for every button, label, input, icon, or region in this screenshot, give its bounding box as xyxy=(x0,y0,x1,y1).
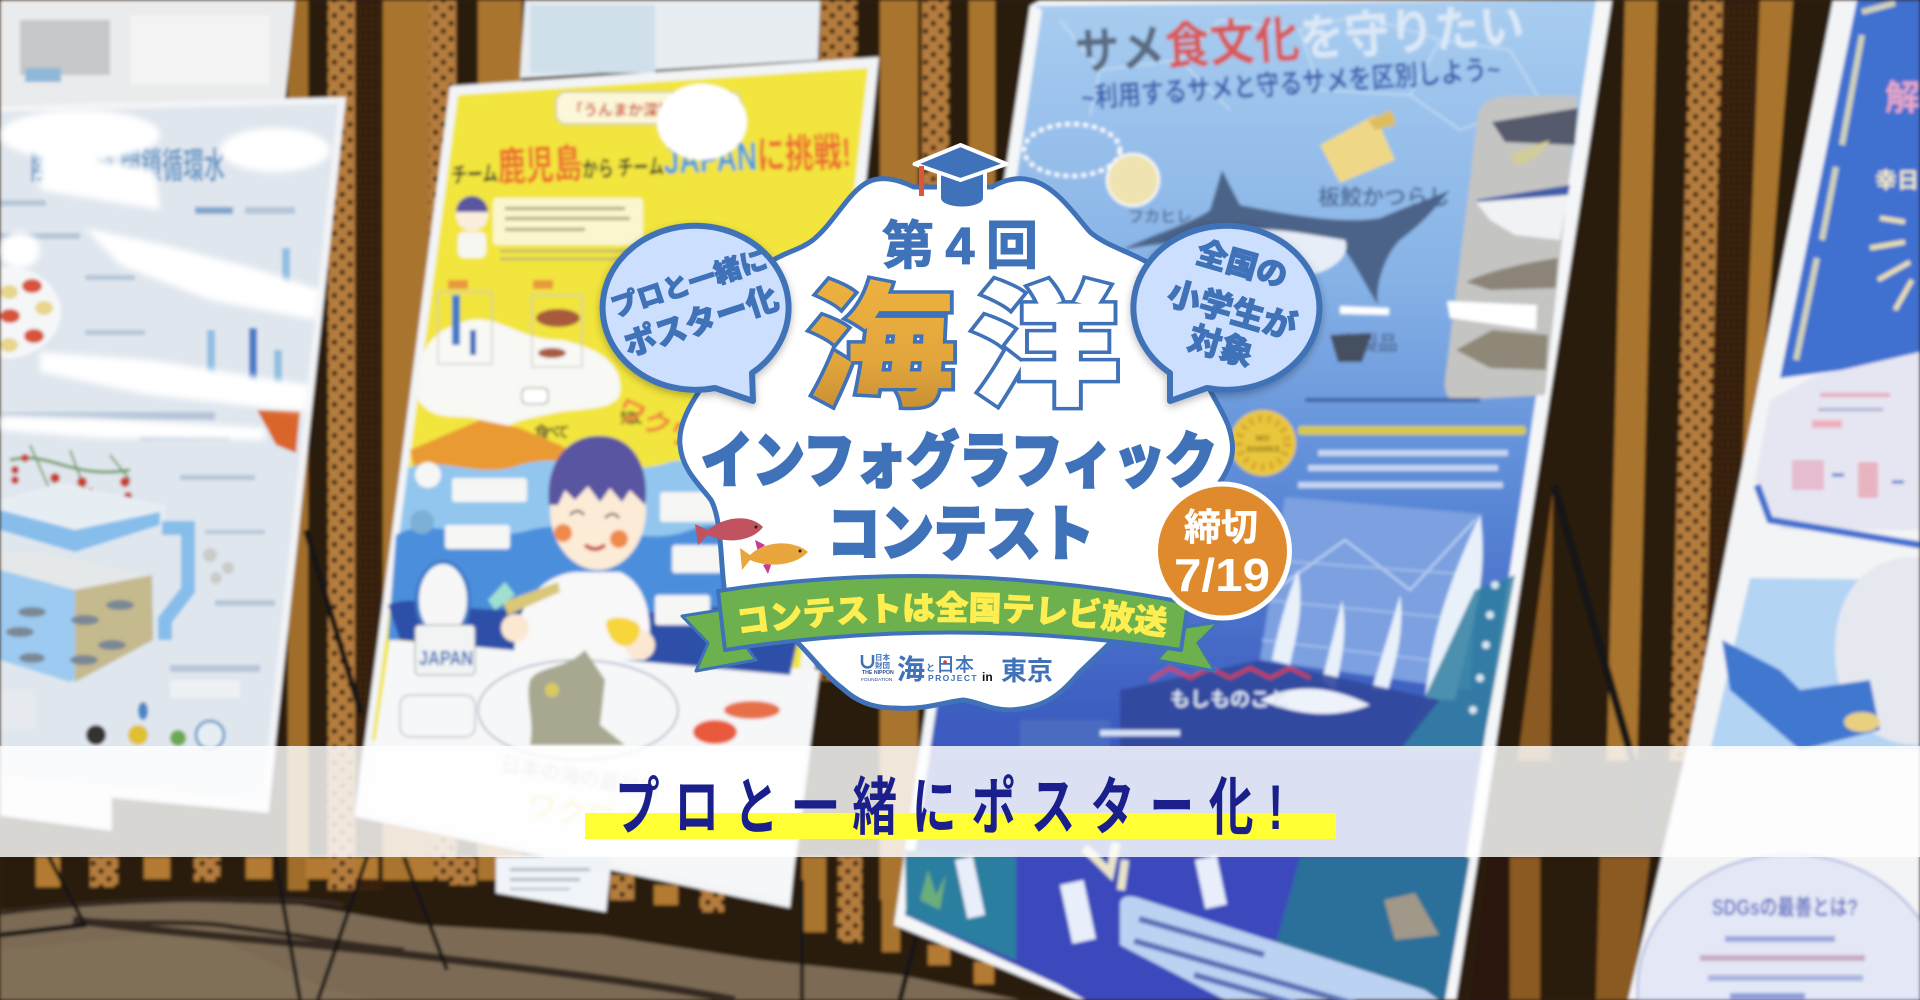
translucent white caption band xyxy=(0,746,1920,857)
plate and fish xyxy=(400,650,780,760)
logo row: The Nippon Foundation / 海と日本 PROJECT in 東京: FOUNDATION xyxy=(861,677,893,683)
orange wedge xyxy=(257,410,300,453)
cutting board xyxy=(1320,115,1395,183)
small sheet behind yellow poster xyxy=(520,0,820,78)
badge: deadline 7/19: 締切 xyxy=(1184,507,1258,548)
sparkle rays xyxy=(1870,218,1912,310)
NO SHARKS sun badge: SHARKS xyxy=(1246,445,1281,454)
bubble: プロと一緒にポスター化 xyxy=(603,226,789,401)
bubble: 全国の小学生が対象: 全国の xyxy=(1192,235,1291,294)
hydroponic top tank xyxy=(0,483,188,640)
ribbon path text: コンテストは全国テレビ放送 xyxy=(739,590,1167,638)
labels: 牛製品 xyxy=(1338,332,1398,355)
header label: 「うんまか深掘」 xyxy=(568,101,688,119)
teal paper scrap xyxy=(488,582,515,610)
circle with fish xyxy=(0,267,61,358)
bubble: 全国の小学生が対象: 小学生が xyxy=(1163,274,1300,346)
easel stand legs xyxy=(0,485,1660,1000)
JAPAN icon xyxy=(415,562,475,675)
bottom figures xyxy=(0,680,240,749)
kanji title fragments: 解 xyxy=(1885,79,1920,118)
panel content xyxy=(1792,393,1904,498)
water net pattern xyxy=(1060,15,1540,130)
poster: shark poster (centre right) xyxy=(894,0,1612,1000)
poster: aquaponics (left) xyxy=(0,97,346,830)
carpet floor xyxy=(0,900,1020,1000)
title: チーム鹿児島から チームJAPANに挑戦! xyxy=(450,131,852,192)
dark blue section xyxy=(1120,660,1440,750)
board handle xyxy=(1368,110,1396,130)
kanji title fragments: 幸日 xyxy=(1875,168,1919,193)
info boxes in waves xyxy=(410,462,722,625)
bubble: プロと一緒にポスター化: プロと一緒に xyxy=(608,244,771,323)
subtitle: ~利用するサメと守るサメを区別しよう~ xyxy=(1080,54,1501,114)
panel outline xyxy=(1757,485,1920,545)
lower panels below band xyxy=(905,843,1470,1000)
poster: yellow Kagoshima poster xyxy=(355,57,879,908)
logo row: The Nippon Foundation / 海と日本 PROJECT in 東京: THE NIPPON xyxy=(862,670,894,676)
orange mountain xyxy=(410,420,600,470)
tomato plants xyxy=(10,445,132,500)
small labels xyxy=(522,388,727,468)
speech box xyxy=(493,198,643,245)
logo row: The Nippon Foundation / 海と日本 PROJECT in 東京 xyxy=(861,652,1053,686)
boy character xyxy=(501,436,655,660)
fish tank xyxy=(0,548,234,682)
emblem: contest logo xyxy=(595,143,1326,712)
small labels: ワクワク xyxy=(612,392,727,468)
sign text xyxy=(510,868,590,890)
lower pale round panel: SDGsの最善とは? xyxy=(1712,895,1858,920)
icon: red fish xyxy=(695,518,763,545)
text lines xyxy=(1298,398,1526,488)
heading: コンテスト: コンテスト xyxy=(827,501,1094,568)
heading: インフォグラフィック: インフォグラフィック xyxy=(701,428,1217,495)
header pill xyxy=(556,92,741,124)
labels: 板鮫かつらし xyxy=(1318,185,1450,210)
ribbon right tail xyxy=(1157,622,1219,671)
left background sheet xyxy=(0,0,295,105)
jaw bubble xyxy=(1024,124,1120,176)
white circle xyxy=(1835,557,1920,745)
caption text: プロと一緒にポスター化! xyxy=(615,771,1298,843)
heading: 第4回: 第4回 xyxy=(882,218,1038,276)
bubble: 全国の小学生が対象 xyxy=(1133,226,1319,401)
bubble: プロと一緒にポスター化: ポスター化 xyxy=(620,280,783,363)
lower pale round panel xyxy=(1638,854,1920,1000)
section labels xyxy=(0,200,295,672)
small labels: 食べて xyxy=(534,423,570,441)
glare streak xyxy=(1340,301,1537,330)
glare blob xyxy=(657,84,747,160)
JAPAN icon: JAPAN xyxy=(419,648,473,670)
grey shark panel xyxy=(1445,96,1578,400)
wave: navy xyxy=(388,601,800,675)
slat ends below the band xyxy=(36,857,994,984)
NO SHARKS sun badge: NO! xyxy=(1256,434,1270,443)
orange tags xyxy=(448,280,553,289)
logo row: The Nippon Foundation / 海と日本 PROJECT in 東京: 海 xyxy=(897,654,925,685)
jellyfish net xyxy=(1330,333,1372,362)
glare streaks on left poster xyxy=(0,110,330,440)
poster: far right poster xyxy=(1628,0,1920,1000)
text lines xyxy=(500,207,660,260)
gold frame strokes xyxy=(1796,3,1895,360)
heading: 海: 海 xyxy=(807,274,956,423)
gold beak xyxy=(1844,712,1880,732)
figures in cloud xyxy=(438,292,582,367)
section details: もしものこと xyxy=(1170,689,1290,711)
labels xyxy=(1128,185,1450,355)
badge: deadline 7/19: 7/19 xyxy=(1174,549,1270,601)
grey hex info panel xyxy=(1755,352,1920,530)
ribbon banner xyxy=(718,576,1188,650)
labels: フカヒレ xyxy=(1128,208,1192,226)
badge: deadline 7/19 xyxy=(1156,484,1290,618)
kanji title fragments xyxy=(1875,79,1920,193)
bubble: 全国の小学生が対象: 対象 xyxy=(1184,319,1258,373)
shark illustration xyxy=(1122,170,1450,305)
NO SHARKS sun badge xyxy=(1230,410,1296,476)
section details xyxy=(1020,668,1370,750)
light blue lower xyxy=(1710,578,1920,750)
wave: light blue xyxy=(396,460,758,560)
logo row: The Nippon Foundation / 海と日本 PROJECT in 東京: 日本 xyxy=(936,654,974,676)
wave: mid blue xyxy=(388,526,750,640)
lower text faint: 日本の海の最前線 xyxy=(499,752,661,803)
logo row: The Nippon Foundation / 海と日本 PROJECT in 東京: と xyxy=(926,663,935,673)
whale tail xyxy=(1722,640,1880,750)
small sign under yellow poster xyxy=(496,855,612,912)
white badge blob xyxy=(680,179,1233,710)
white cloud xyxy=(418,319,620,430)
heading: 洋: 洋 xyxy=(970,274,1120,423)
character icon xyxy=(456,196,488,258)
sheet detail xyxy=(530,5,655,73)
logo row: The Nippon Foundation / 海と日本 PROJECT in 東京: 日本 xyxy=(875,652,890,662)
teal side band xyxy=(1400,575,1515,750)
logo row: The Nippon Foundation / 海と日本 PROJECT in 東京: 東京 xyxy=(1001,656,1053,686)
logo row: The Nippon Foundation / 海と日本 PROJECT in 東京: PROJECT xyxy=(928,673,978,683)
logo row: The Nippon Foundation / 海と日本 PROJECT in 東京: 財団 xyxy=(875,660,890,670)
fin soup xyxy=(1107,154,1159,206)
small labels: 知って xyxy=(620,409,645,427)
title text: 陸上養殖 閉鎖循環水 xyxy=(30,145,225,186)
scale dots xyxy=(1469,581,1499,714)
ribbon left tail xyxy=(682,610,756,671)
sheet scribbles xyxy=(20,15,270,85)
chart panel xyxy=(1260,497,1483,700)
bars xyxy=(207,248,290,385)
lower text faint: ワクワク xyxy=(524,789,648,843)
icon: yellow fish xyxy=(740,540,808,574)
pale lower panel xyxy=(365,640,820,900)
lower text faint xyxy=(499,752,661,843)
icon: graduation cap xyxy=(914,145,1007,208)
yellow highlighter bar xyxy=(585,813,1336,839)
logo row: The Nippon Foundation / 海と日本 PROJECT in 東京: in xyxy=(982,670,993,684)
